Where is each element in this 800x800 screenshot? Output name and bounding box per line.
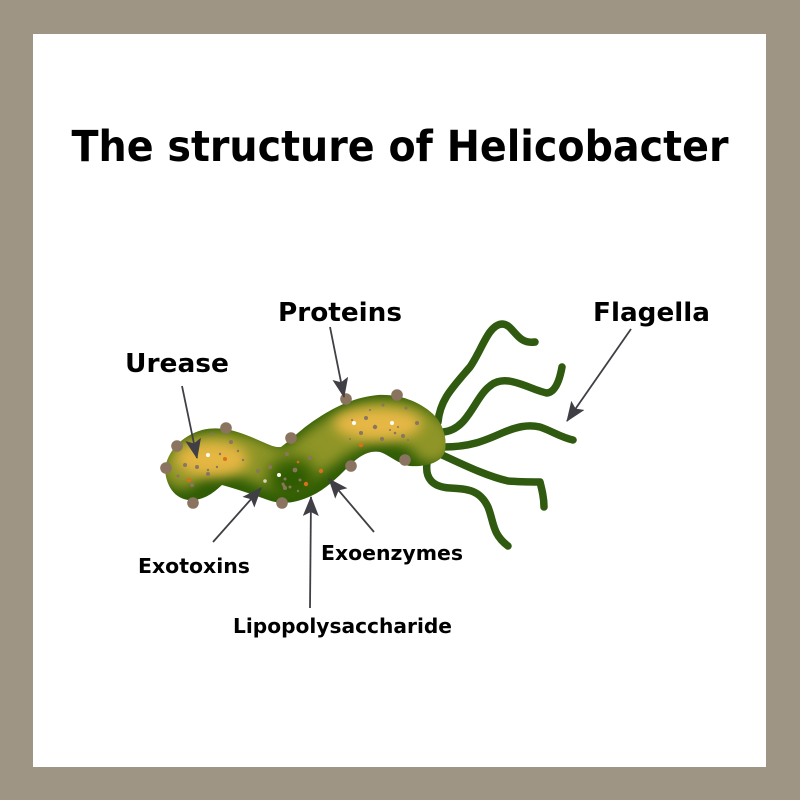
bright granules xyxy=(206,421,394,483)
label: Urease: Urease xyxy=(125,349,229,379)
arrow: Flagella xyxy=(567,329,631,421)
arrow: Urease xyxy=(182,386,197,458)
label: Exoenzymes: Exoenzymes xyxy=(321,541,463,565)
bacterium body xyxy=(160,389,455,509)
body base xyxy=(166,394,446,503)
inclusions xyxy=(176,404,419,492)
label: Proteins: Proteins xyxy=(278,298,402,328)
title: The structure of Helicobacter xyxy=(72,122,729,172)
label: Exotoxins: Exotoxins xyxy=(138,554,250,578)
label: Lipopolysaccharide: Lipopolysaccharide xyxy=(233,614,452,638)
surface proteins xyxy=(160,389,411,509)
arrow: Proteins xyxy=(330,327,344,397)
orange granules xyxy=(187,443,363,486)
arrow: Lipopolysaccharide xyxy=(310,497,311,608)
arrow: Exoenzymes xyxy=(329,479,374,532)
arrow: Exotoxins xyxy=(213,488,261,542)
label: Flagella: Flagella xyxy=(593,298,710,328)
flagella xyxy=(427,324,573,546)
